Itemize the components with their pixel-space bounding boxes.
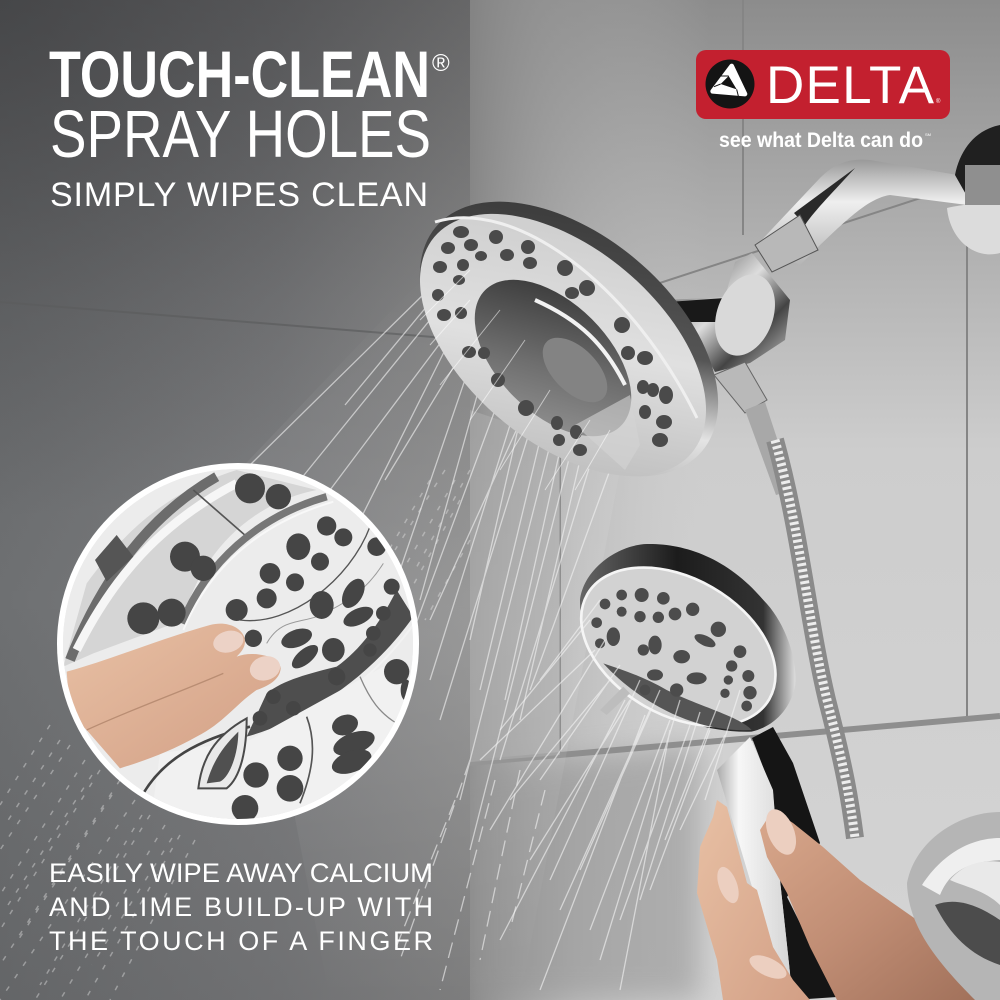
bottom caption: EASILY WIPE AWAY CALCIUM xyxy=(49,858,433,888)
nozzles xyxy=(127,473,411,822)
hand shower nozzles xyxy=(591,588,757,711)
thumb and palm xyxy=(760,810,1000,1000)
title xyxy=(49,37,450,214)
Delta logo: SM xyxy=(925,132,931,137)
Delta logo: ® xyxy=(936,98,941,105)
title: SIMPLY WIPES CLEAN xyxy=(50,176,428,214)
hand shower handle xyxy=(717,727,837,1000)
hand shower xyxy=(553,535,803,758)
title: ® xyxy=(432,50,450,77)
centre hole xyxy=(446,251,660,470)
Delta logo: DELTA xyxy=(766,56,935,115)
spray haze xyxy=(230,270,620,1000)
faucet valve xyxy=(907,812,1000,1000)
title: TOUCH-CLEAN xyxy=(49,37,430,111)
selector switch xyxy=(198,718,247,788)
lower chrome panels xyxy=(269,690,342,730)
Delta logo xyxy=(696,50,950,152)
hose xyxy=(775,440,855,838)
left dark panel xyxy=(0,0,470,1000)
finger xyxy=(67,624,281,768)
shower arm and mount xyxy=(668,125,1000,495)
bottom caption: AND LIME BUILD-UP WITH xyxy=(49,892,433,922)
fingers xyxy=(697,800,810,1000)
bottom caption xyxy=(49,858,433,956)
bottom caption: THE TOUCH OF A FINGER xyxy=(49,926,433,956)
water droplets lower left xyxy=(0,470,470,1000)
dark nozzle band xyxy=(247,590,413,737)
overhead shower head xyxy=(369,147,769,531)
nozzles xyxy=(432,226,673,456)
title: SPRAY HOLES xyxy=(50,97,431,172)
water spray: overhead head xyxy=(250,290,610,990)
Delta logo: see what Delta can do xyxy=(719,129,923,152)
water spray over head xyxy=(420,270,610,490)
water spray: hand shower xyxy=(480,600,740,990)
outer chrome band xyxy=(63,470,317,667)
hand holding shower xyxy=(697,800,1000,1000)
inset circle xyxy=(50,460,430,830)
inner face lines xyxy=(240,527,370,621)
